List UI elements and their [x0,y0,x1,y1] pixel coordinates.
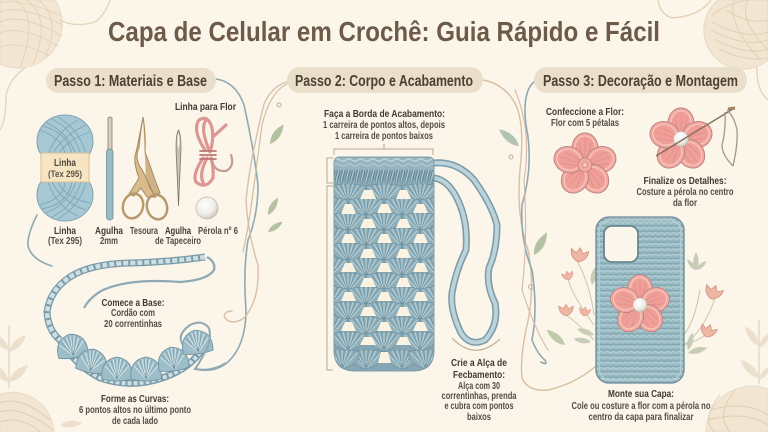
icon: stork scissors [120,117,170,222]
callout: assemble the case: centro da capa para finalizar [588,412,694,423]
callout: make the flower [546,106,624,129]
heading: step 2 [287,67,483,93]
callout: closing strap: Crie a Alça de [451,357,507,369]
heading: step 1 [46,68,216,93]
icon: yarn skein: Linha [54,158,76,169]
material labels: Agulha [95,225,123,237]
callout: assemble the case: Monte sua Capa: [608,388,674,400]
callout: assemble the case: Cole ou costure a flor com a pérola no [572,401,710,412]
callout: start the base: Comece a Base: [102,297,164,309]
material labels: Tesoura [130,226,158,237]
panel: step 1 materials and base [37,68,238,427]
yarn ball: top left [0,0,110,130]
yarn ball: top right [658,0,768,100]
floral sprigs around case [559,246,724,356]
icon: yarn skein: (Tex 295) [48,169,82,180]
callout: make the flower: Flor com 5 pétalas [551,118,619,129]
callout: finishing border: Faça a Borda de Acabamento: [324,108,445,120]
icon: yarn skein [37,115,93,221]
decorative leaves between panels [265,103,567,348]
material labels: 2mm [100,236,118,247]
callout: closing strap: e cubra com pontos [444,401,514,412]
material labels: Pérola nº 6 [198,226,238,237]
label: thread for flower: Linha para Flor [175,101,236,113]
callout: form the curves: 6 pontos altos no último ponto [79,405,191,416]
title: Capa de Celular em Crochê: Guia Rápido e Fácil [108,16,660,47]
callout: closing strap [442,357,517,423]
callout: finishing border: 1 carreira de pontos altos, depois [323,120,445,131]
material labels: Agulha [165,225,191,237]
callout: make the flower: Confeccione a Flor: [546,106,624,118]
callout: form the curves: de cada lado [112,416,158,427]
icon: pink thread skein [195,118,232,185]
panel: step 2 body and finish [287,67,517,423]
callout: finish the details: Finalize os Detalhes: [644,175,726,187]
callout: assemble the case [572,388,710,423]
phone pouch [334,156,434,372]
callout: form the curves: Forme as Curvas: [101,393,169,405]
heading: step 3 [534,67,747,93]
yarn ball and sprigs: bottom left [0,325,82,432]
callout: closing strap: Fecbamento: [453,369,505,381]
flower with pearl and needle [647,108,737,174]
callout: finishing border [323,108,445,142]
brackets [327,144,433,370]
heading: step 2: Passo 2: Corpo e Acabamento [295,73,473,90]
callout: closing strap: baixos [467,412,491,423]
material labels [48,225,238,247]
crocheted phone case [596,217,684,383]
callout: finishing border: 1 carreira de pontos baixos [335,131,433,142]
heading: step 1: Passo 1: Materiais e Base [54,73,207,90]
camera cutout [604,226,638,262]
flower with five petals [551,133,619,199]
icon: pearl [196,197,218,219]
callout: finish the details: da flor [673,198,697,209]
flower with pearl on case [607,275,673,337]
icon: crochet hook [106,117,113,220]
callout: finish the details: Costure a pérola no centro [636,187,734,198]
arc under strap [452,338,500,350]
strap [434,163,497,342]
material labels: (Tex 295) [48,236,82,247]
callout: finish the details [636,175,734,209]
callout: closing strap: Alça com 30 [458,381,500,392]
callout: start the base: 20 correntinhas [104,319,162,330]
icon: tapestry needle [176,130,181,206]
connecting threads [28,79,596,390]
callout: closing strap: correntinhas, prenda [442,391,517,402]
callout: form the curves [79,393,191,427]
material labels: de Tapeceiro [155,236,201,247]
material labels: Linha [54,225,76,237]
yarn ball and sprigs: bottom right [706,320,768,432]
illustration: chain and shell curve [47,257,226,383]
callout: start the base: Cordão com [111,308,155,319]
panel: step 3 decoration and assembly [534,67,747,423]
callout: start the base [102,297,164,330]
